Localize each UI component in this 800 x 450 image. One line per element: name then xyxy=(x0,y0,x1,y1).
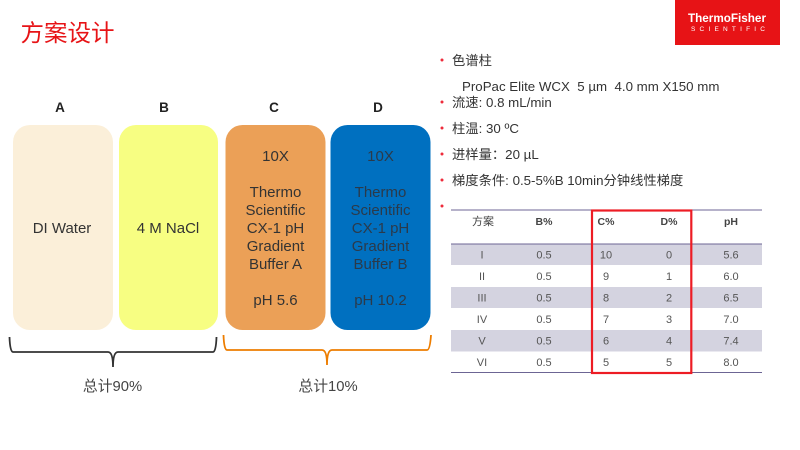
text block: chromatography conditions: 梯度条件: 0.5-5%B 10min分钟线性梯度 xyxy=(452,172,683,188)
table rows: 0.5 xyxy=(536,314,552,326)
panel: B NaCl: 4 M NaCl xyxy=(137,220,199,237)
table header: 方案 xyxy=(472,214,494,228)
text block: chromatography conditions: 流速: 0.8 mL/min xyxy=(452,95,552,110)
table rows: 4 xyxy=(666,336,672,348)
panel: D buffer B: Scientific xyxy=(350,202,411,219)
table rows: 0.5 xyxy=(536,292,552,304)
table rows: III xyxy=(477,292,487,304)
table header: C% xyxy=(598,216,615,228)
table rows: 0.5 xyxy=(536,357,552,369)
text block: chromatography conditions: 柱温: 30 ºC xyxy=(452,121,519,136)
panel: C buffer A: C xyxy=(269,100,279,115)
table: gradient scheme xyxy=(451,210,762,372)
table rows: 0.5 xyxy=(536,271,552,283)
table rows: 2 xyxy=(666,292,672,304)
panel: C buffer A: Buffer A xyxy=(249,256,302,273)
logo: Thermo Fisher Scientific xyxy=(675,0,780,45)
panel: C buffer A: Thermo xyxy=(250,184,301,201)
panel: D buffer B: pH 10.2 xyxy=(354,292,407,309)
panel: D buffer B: D xyxy=(373,100,383,115)
table rows: 5 xyxy=(666,357,672,369)
panel: D buffer B: CX-1 pH xyxy=(352,220,409,237)
table rows: 9 xyxy=(603,271,609,283)
table rows: 6 xyxy=(603,336,609,348)
table rows: II xyxy=(479,271,485,283)
logo: Thermo Fisher Scientific: SCIENTIFIC xyxy=(691,26,765,33)
label: total 90%: 总计90% xyxy=(83,378,142,395)
brace: C and D total xyxy=(224,335,431,365)
table rows: I xyxy=(480,250,484,262)
label: total 10%: 总计10% xyxy=(298,378,358,395)
table rows: 5 xyxy=(603,357,609,369)
table rows xyxy=(477,250,739,369)
table header: B% xyxy=(536,216,553,228)
table rows: 0 xyxy=(666,250,672,262)
panel: C buffer A: 10X xyxy=(262,148,289,165)
table header: pH xyxy=(724,216,738,228)
panel: C buffer A: Scientific xyxy=(245,202,306,219)
text block: chromatography conditions: ProPac Elite WCX 5 µm 4.0 mm X150 mm xyxy=(462,79,719,94)
table rows: 6.0 xyxy=(723,271,739,283)
highlight box: C% and D% columns xyxy=(592,210,691,373)
table rows: 7.0 xyxy=(723,314,739,326)
table rows: 6.5 xyxy=(723,292,739,304)
table rows: 7.4 xyxy=(723,336,739,348)
table rows: VI xyxy=(477,357,487,369)
table rows: 1 xyxy=(666,271,672,283)
table rows: 0.5 xyxy=(536,336,552,348)
text block: chromatography conditions: 进样量：20 µL xyxy=(452,147,539,162)
title: 方案设计 xyxy=(20,20,114,46)
text block: chromatography conditions: 色谱柱 xyxy=(452,52,492,68)
table rows: 10 xyxy=(600,250,612,262)
table rows: IV xyxy=(477,314,488,326)
logo: Thermo Fisher Scientific: ThermoFisher xyxy=(688,13,767,25)
table header xyxy=(472,214,738,228)
panel: D buffer B: Gradient xyxy=(352,238,410,255)
panel: C buffer A: CX-1 pH xyxy=(247,220,304,237)
text block: chromatography conditions xyxy=(440,52,719,208)
table rows: 3 xyxy=(666,314,672,326)
table rows: V xyxy=(478,336,486,348)
table rows: 8 xyxy=(603,292,609,304)
panel: A DI water: A xyxy=(55,100,65,115)
table header: D% xyxy=(661,216,678,228)
panel: A DI water: DI Water xyxy=(33,220,91,237)
panel: C buffer A xyxy=(226,100,326,330)
panel: D buffer B xyxy=(330,100,430,330)
table rows: 8.0 xyxy=(723,357,739,369)
table rows: 5.6 xyxy=(723,250,739,262)
panel: C buffer A: Gradient xyxy=(247,238,305,255)
panel: D buffer B: 10X xyxy=(367,148,394,165)
panel: B NaCl: B xyxy=(159,100,169,115)
table rows: 0.5 xyxy=(536,250,552,262)
panel: B NaCl xyxy=(119,100,218,330)
panel: A DI water xyxy=(13,100,113,330)
table rows: 7 xyxy=(603,314,609,326)
brace: A and B total xyxy=(10,337,216,367)
panel: D buffer B: Thermo xyxy=(355,184,406,201)
panel: C buffer A: pH 5.6 xyxy=(253,292,298,309)
panel: D buffer B: Buffer B xyxy=(354,256,407,273)
